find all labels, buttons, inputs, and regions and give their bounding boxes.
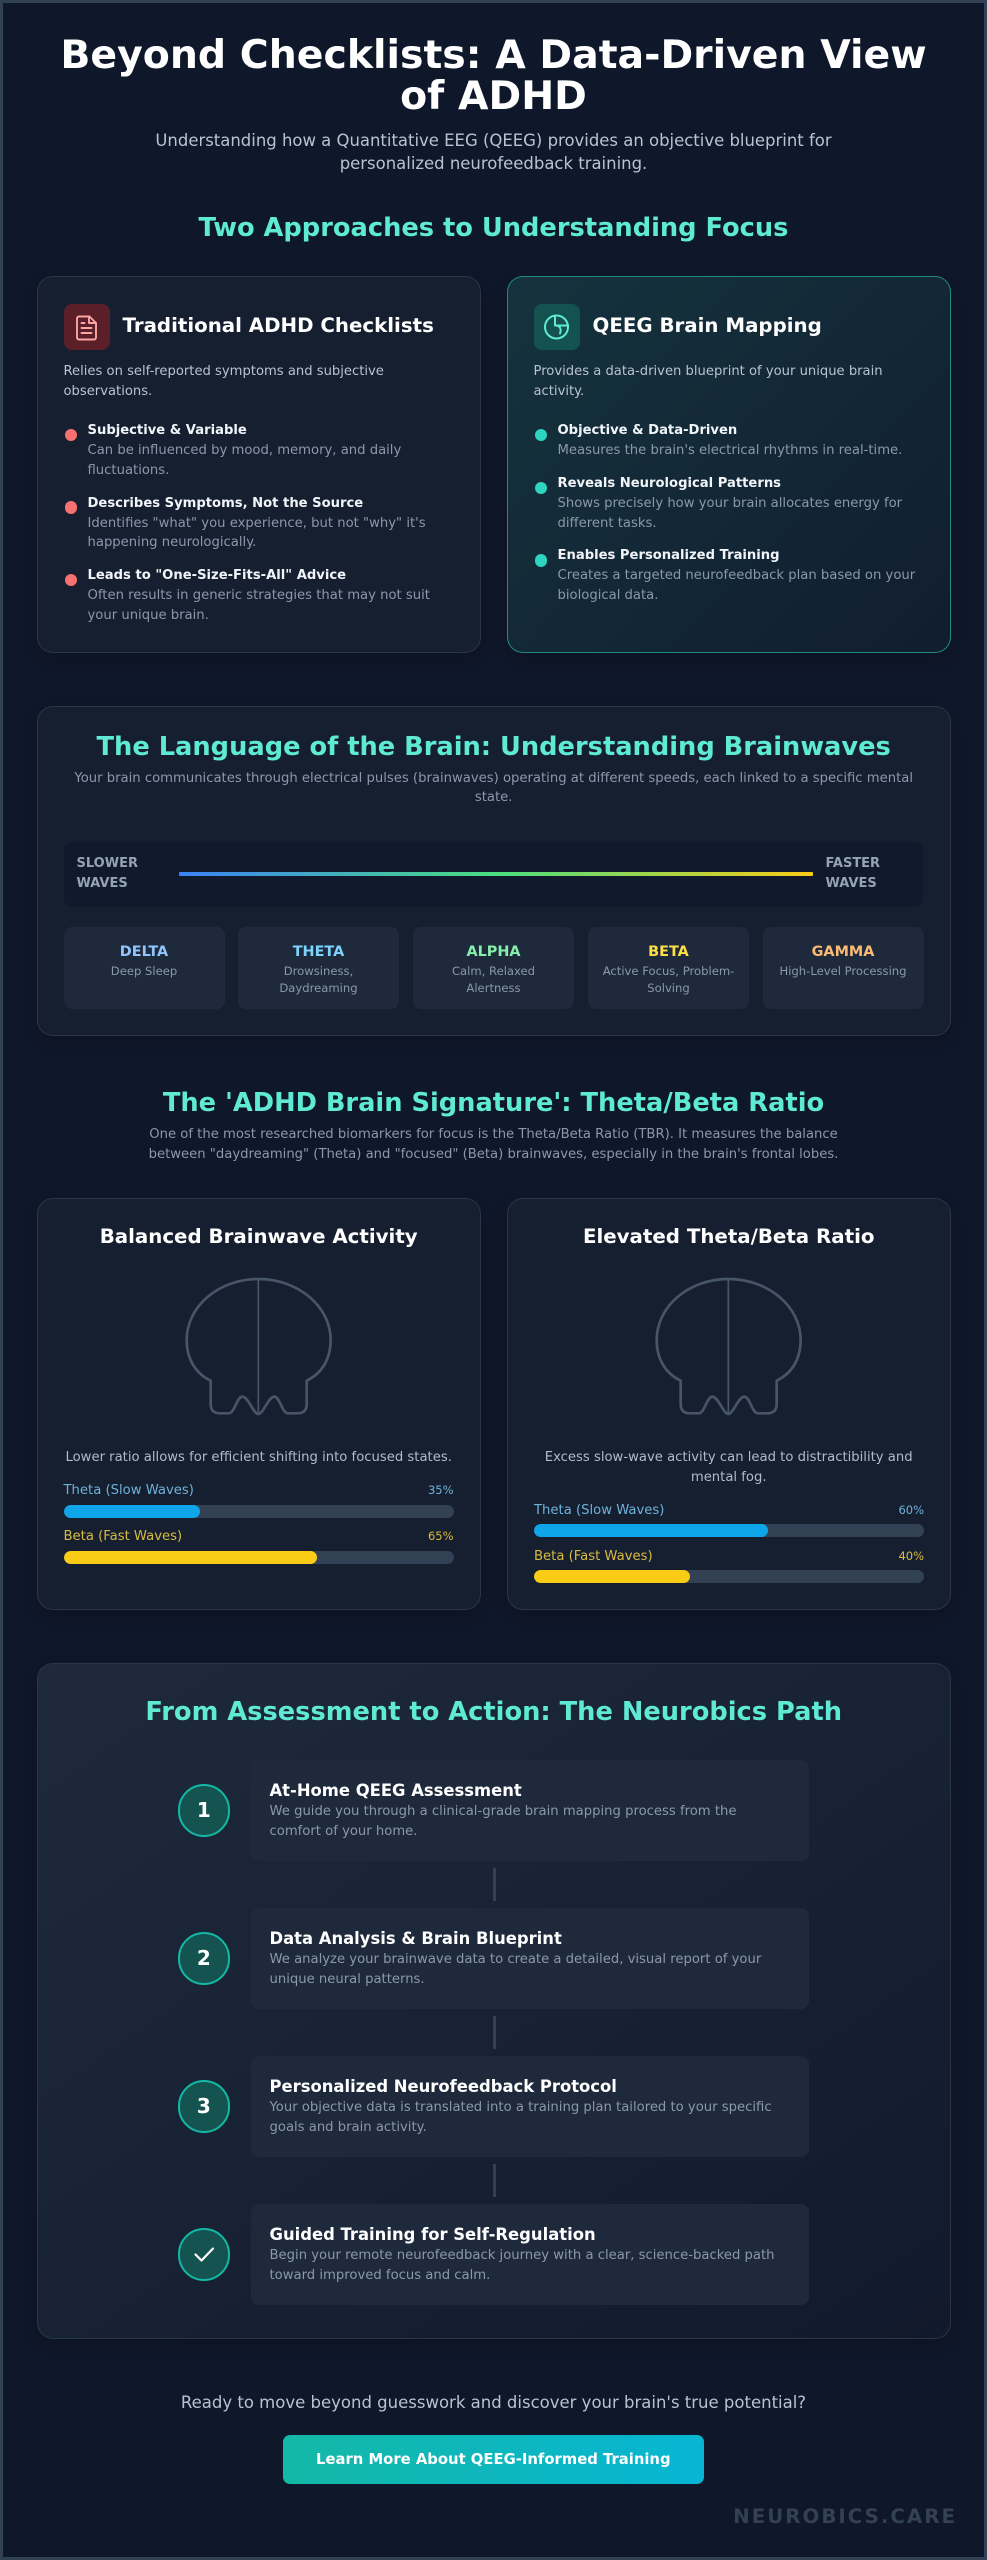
card heading: QEEG Brain Mapping [592,314,822,337]
description: theta beta ratio: One of the most researched biomarkers for focus is the Theta/Beta Ratio (TBR). It measures the balance [149,1126,838,1142]
card heading: Elevated Theta/Beta Ratio [583,1225,874,1248]
list item: training [535,548,916,603]
bar: beta: 65% [428,1529,454,1543]
list item: subjective: Subjective & Variable [88,423,247,438]
subtitle: personalized neurofeedback training. [340,154,647,173]
brand logo: NEUROBICS.CARE [733,2505,957,2528]
wave: alpha [413,927,574,1009]
bar: beta [64,1529,454,1564]
list item: training: biological data. [558,588,658,603]
icon: brain chart [534,304,580,350]
list item: advice: your unique brain. [88,608,209,623]
list item: subjective: Can be influenced by mood, memory, and daily [88,443,401,458]
list item: patterns: different tasks. [558,516,657,531]
call to action button [283,2435,704,2484]
connector 2 [493,2016,496,2049]
bar: theta: 35% [428,1483,454,1497]
title: Beyond Checklists: A Data-Driven View [60,32,927,78]
step 4 [178,2204,809,2305]
wave: gamma: High-Level Processing [779,964,907,978]
wave: beta: Active Focus, Problem- [603,964,734,978]
step 4: toward improved focus and calm. [270,2268,490,2283]
list item: objective: Measures the brain's electrical rhythms in real-time. [558,443,902,458]
heading: adhd brain signature: The 'ADHD Brain Signature': Theta/Beta Ratio [163,1088,824,1118]
step 4: Guided Training for Self-Regulation [270,2225,596,2244]
connector 3 [493,2164,496,2197]
list item: advice: Leads to "One-Size-Fits-All" Advice [88,568,346,583]
wave: alpha: Alertness [466,981,521,995]
label: slower: WAVES [76,876,128,891]
panel: elevated theta beta ratio [506,1198,951,1610]
list item: patterns: Reveals Neurological Patterns [558,476,781,491]
description: state. [475,790,512,805]
list item: symptoms: Describes Symptoms, Not the Source [88,496,363,511]
description: Your brain communicates through electrical pulses (brainwaves) operating at different speeds, each linked to a specific mental [74,771,913,786]
card intro: Provides a data-driven blueprint of your unique brain [534,364,883,379]
bar: theta [63,1483,454,1518]
list item: advice [65,568,430,623]
card heading: Balanced Brainwave Activity [100,1225,418,1248]
subtitle [155,130,832,173]
speed spectrum [64,842,922,907]
heading: From Assessment to Action: The Neurobics Path [145,1697,842,1727]
caption: Excess slow-wave activity can lead to distractibility and [545,1450,913,1465]
label: slower: SLOWER [76,856,138,871]
card intro [534,364,883,399]
wave: alpha: ALPHA [466,944,521,960]
panel: balanced brainwave activity [36,1198,481,1610]
wave: beta [588,927,749,1009]
bar: theta [534,1503,924,1537]
wave: theta: Daydreaming [279,981,358,995]
step 3: 3 [197,2094,211,2118]
step 3: goals and brain activity. [270,2120,427,2135]
step 3: Personalized Neurofeedback Protocol [270,2077,617,2096]
gradient bar [178,872,812,876]
step 1: We guide you through a clinical-grade brain mapping process from the [270,1804,736,1819]
bar: theta: Theta (Slow Waves) [64,1483,194,1498]
step 1: comfort of your home. [270,1824,418,1839]
list item: symptoms [65,496,426,550]
panel: neurobics path [36,1663,951,2339]
list item: objective: Objective & Data-Driven [558,423,737,438]
step 1: At-Home QEEG Assessment [270,1781,522,1800]
panel: language of the brain [36,706,951,1036]
description: theta beta ratio: between "daydreaming" (Theta) and "focused" (Beta) brainwaves, especially in the brain's frontal lobes. [149,1146,838,1162]
step 2: Data Analysis & Brain Blueprint [270,1929,562,1948]
list item: patterns: Shows precisely how your brain allocates energy for [558,496,902,511]
caption: Lower ratio allows for efficient shifting into focused states. [65,1450,452,1465]
wave: delta: DELTA [120,944,168,960]
list item: subjective [65,423,401,478]
list item: training: Enables Personalized Training [558,548,780,563]
list item: objective [535,423,902,458]
list item: patterns [535,476,902,531]
label: faster: FASTER [826,856,880,871]
list item: training: Creates a targeted neurofeedback plan based on your [558,568,915,583]
label: faster: WAVES [826,876,877,891]
wave: beta: BETA [648,944,689,960]
step 1: 1 [197,1798,211,1822]
bar: beta: 40% [898,1549,924,1563]
call to action button: Learn More About QEEG-Informed Training [316,2451,671,2468]
heading: The Language of the Brain: Understanding Brainwaves [97,732,891,762]
step 3: Your objective data is translated into a training plan tailored to your specific [270,2100,772,2115]
wave: delta: Deep Sleep [111,964,177,978]
card intro: observations. [64,384,152,399]
label: faster [826,856,880,891]
caption [545,1450,913,1485]
label: slower [76,856,138,891]
title: of ADHD [400,73,587,119]
bar: beta: Beta (Fast Waves) [534,1549,653,1564]
icon: document [64,304,110,350]
list item: symptoms: happening neurologically. [88,535,256,550]
panel: traditional checklists [36,276,481,653]
step 2: We analyze your brainwave data to create a detailed, visual report of your [270,1952,761,1967]
card intro [64,364,384,399]
wave: gamma: GAMMA [812,944,874,960]
step 2 [178,1908,809,2009]
icon: brain [655,1278,802,1416]
subtitle: Understanding how a Quantitative EEG (QEEG) provides an objective blueprint for [155,130,832,150]
step 2: 2 [197,1946,211,1970]
connector 1 [493,1868,496,1901]
step 1 [178,1781,736,1839]
panel: qeeg brain mapping [506,276,951,653]
caption: mental fog. [691,1470,767,1485]
call to action text: Ready to move beyond guesswork and discover your brain's true potential? [181,2393,806,2412]
title [60,32,927,119]
icon: check [178,2228,230,2281]
bar: beta [534,1549,924,1583]
heading: two approaches: Two Approaches to Understanding Focus [199,213,788,243]
wave: gamma [762,927,924,1009]
wave: theta: THETA [293,944,344,960]
wave: delta [64,927,224,1009]
step 3 [178,2056,809,2157]
list item: advice: Often results in generic strategies that may not suit [88,588,430,603]
wave: theta [238,927,399,1009]
wave: theta: Drowsiness, [284,964,353,978]
bar: theta: Theta (Slow Waves) [534,1503,664,1518]
description [74,771,913,805]
step 2: unique neural patterns. [270,1972,425,1987]
icon: brain [185,1278,332,1416]
card intro: activity. [534,384,584,399]
bar: theta: 60% [898,1503,924,1517]
bar: beta: Beta (Fast Waves) [64,1529,182,1544]
list item: subjective: fluctuations. [88,463,169,478]
list item: symptoms: Identifies "what" you experience, but not "why" it's [88,516,426,531]
wave: alpha: Calm, Relaxed [452,964,535,978]
card intro: Relies on self-reported symptoms and subjective [64,364,384,379]
card heading: Traditional ADHD Checklists [122,314,434,337]
wave: beta: Solving [647,981,690,995]
step 4: Begin your remote neurofeedback journey with a clear, science-backed path [270,2248,775,2263]
description: theta beta ratio [149,1126,838,1162]
